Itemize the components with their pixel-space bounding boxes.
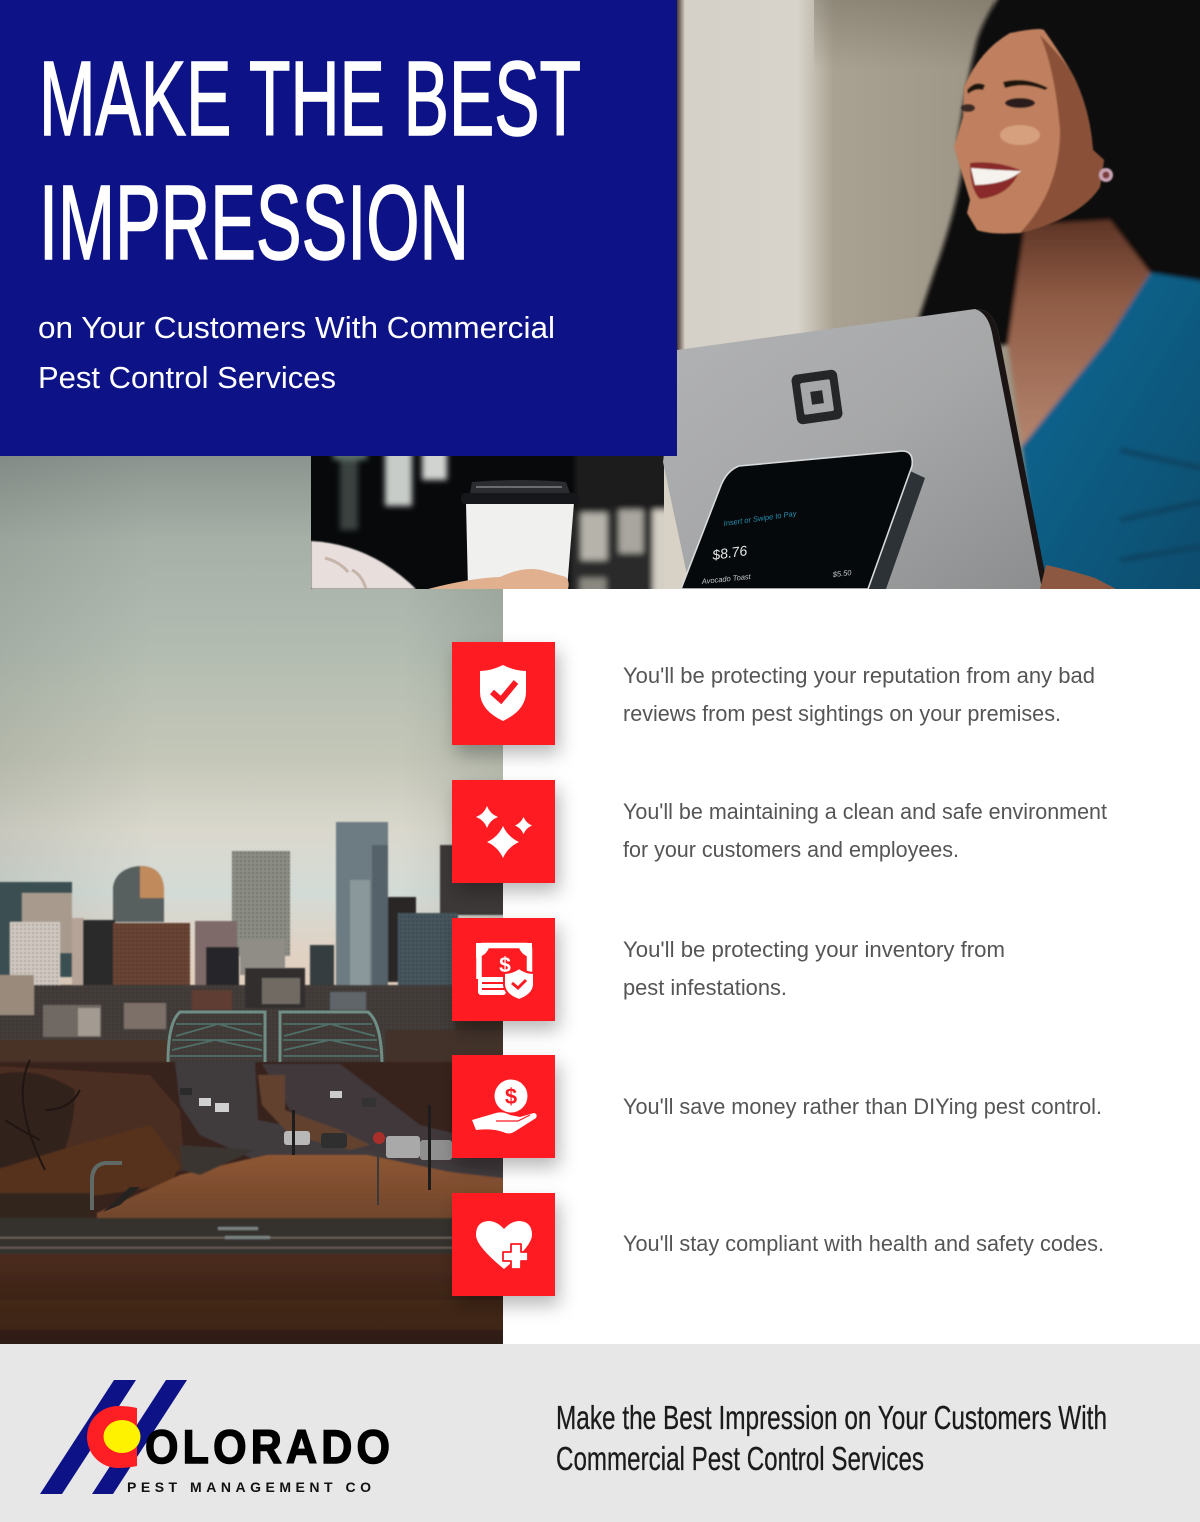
payment screen: Avocado Toast bbox=[700, 572, 752, 586]
footer panel bbox=[0, 1344, 1200, 1522]
subtitle: on Your Customers With Commercial bbox=[38, 310, 555, 345]
benefit text 3: You'll be protecting your inventory from bbox=[623, 937, 1005, 962]
benefit text 1 bbox=[623, 663, 1095, 726]
payment screen: $5.50 bbox=[831, 568, 853, 579]
benefit text 3: pest infestations. bbox=[623, 975, 787, 1000]
title panel bbox=[0, 0, 677, 456]
title bbox=[39, 40, 581, 282]
benefit text 1: You'll be protecting your reputation from any bad bbox=[623, 663, 1095, 688]
benefit text 3 bbox=[623, 937, 1005, 1000]
benefit text 2: You'll be maintaining a clean and safe environment bbox=[623, 799, 1107, 824]
benefit text 2: for your customers and employees. bbox=[623, 837, 959, 862]
tablet back bbox=[663, 309, 1048, 589]
bridge bbox=[168, 1012, 382, 1062]
logo: PEST MANAGEMENT CO bbox=[127, 1479, 371, 1495]
footer caption bbox=[556, 1399, 1107, 1477]
footer caption: Commercial Pest Control Services bbox=[556, 1440, 924, 1477]
icon tile: heart with cross bbox=[452, 1193, 555, 1296]
subtitle bbox=[38, 310, 555, 395]
benefit text 5: You'll stay compliant with health and safety codes. bbox=[623, 1231, 1104, 1256]
benefit text 2 bbox=[623, 799, 1107, 862]
icon tile: hand with coin bbox=[452, 1055, 555, 1158]
hand holding cup bbox=[428, 569, 569, 589]
square logo bbox=[791, 369, 843, 425]
title: IMPRESSION bbox=[39, 164, 469, 282]
payment screen bbox=[681, 451, 925, 589]
scarf bbox=[311, 541, 416, 589]
icon tile: hand with coin: $ bbox=[505, 1084, 517, 1109]
title: MAKE THE BEST bbox=[39, 40, 581, 158]
hand bbox=[1040, 565, 1116, 589]
benefit text 4: You'll save money rather than DIYing pest control. bbox=[623, 1094, 1102, 1119]
icon tile: shield check bbox=[452, 642, 555, 745]
face bbox=[954, 29, 1113, 234]
blurred windows bbox=[329, 456, 664, 589]
photo: woman with payment tablet bbox=[311, 0, 1200, 600]
wall and hair bbox=[677, 0, 1032, 504]
icon tile: sparkles bbox=[452, 780, 555, 883]
coffee cup bbox=[461, 480, 575, 580]
icon tile: money and shield: $ bbox=[499, 954, 511, 977]
payment screen: $8.76 bbox=[710, 542, 748, 563]
benefit text 1: reviews from pest sightings on your premises. bbox=[623, 701, 1061, 726]
logo: OLORADO bbox=[145, 1420, 390, 1473]
photo: denver skyline bbox=[0, 456, 520, 1362]
traffic bbox=[5, 1060, 452, 1212]
icon tile: money and shield bbox=[452, 918, 555, 1021]
subtitle: Pest Control Services bbox=[38, 360, 336, 395]
logo bbox=[40, 1380, 390, 1495]
payment screen: Insert or Swipe to Pay bbox=[723, 509, 798, 528]
